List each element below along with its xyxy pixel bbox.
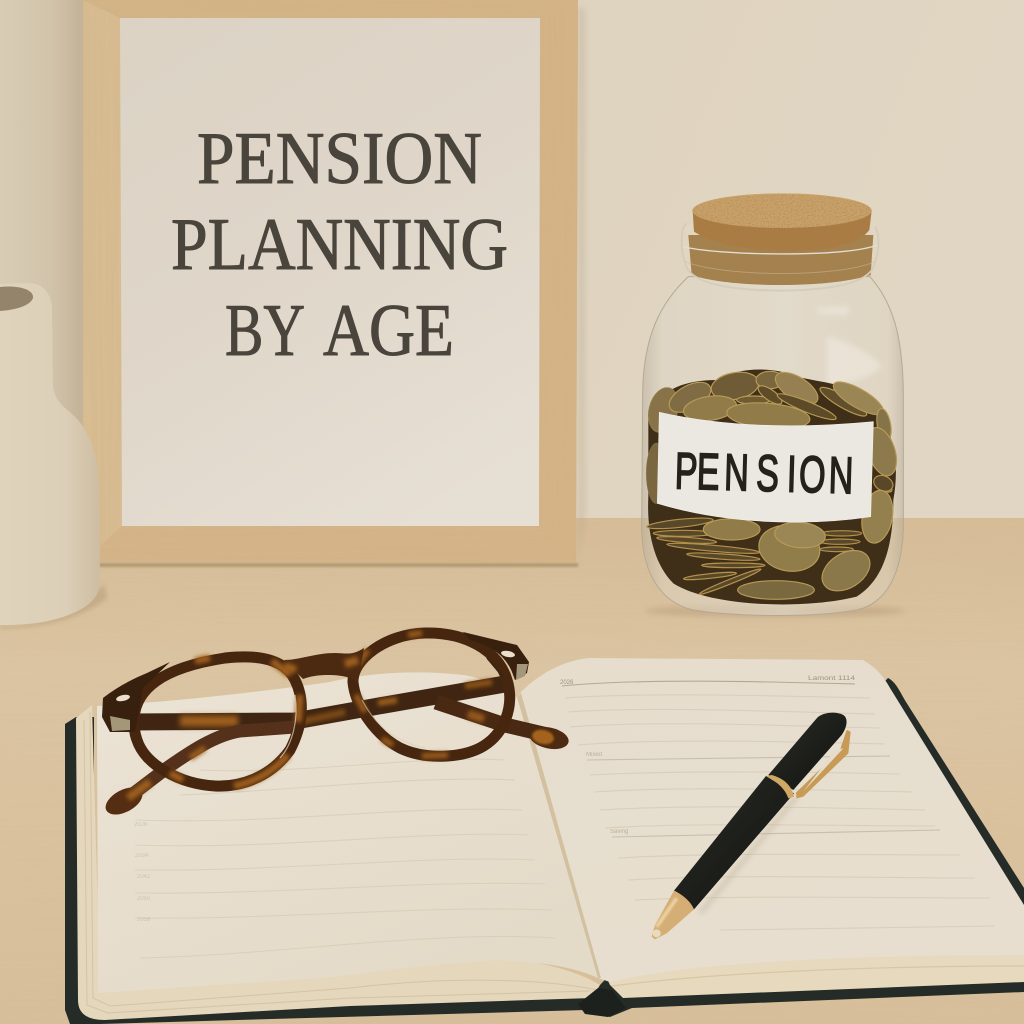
jar of coins	[642, 193, 903, 615]
glass highlight	[817, 307, 882, 387]
endpiece left	[102, 662, 170, 732]
cork stopper top	[692, 193, 872, 251]
wooden desk	[0, 518, 1024, 1024]
jar body	[642, 277, 903, 615]
bridge	[284, 648, 364, 682]
poster title: PLANNING	[171, 204, 508, 286]
left page	[97, 672, 598, 993]
coins	[644, 366, 902, 604]
vase	[0, 283, 107, 629]
poster title: AGE	[323, 290, 454, 372]
endpiece right	[463, 632, 529, 680]
eyeglasses	[101, 632, 571, 820]
page small text: 2026	[560, 680, 574, 686]
pen cap	[768, 713, 847, 790]
pen	[652, 713, 851, 939]
poster title	[171, 118, 508, 372]
poster title: PENSION	[197, 118, 482, 200]
right page	[517, 658, 1024, 982]
gold band	[766, 775, 794, 798]
page small text: 2026	[134, 822, 148, 828]
notebook	[65, 658, 1024, 1024]
page small text: Lamont 1114	[808, 676, 856, 682]
glass neck	[682, 223, 879, 291]
page small text: 2058	[137, 917, 151, 923]
pen shadow	[700, 797, 797, 913]
pen clip	[796, 730, 851, 798]
spine tab	[578, 988, 626, 1017]
left page rules	[135, 759, 555, 958]
spine shadow	[517, 693, 601, 978]
gold tip	[652, 891, 694, 939]
page small text: Saving	[610, 829, 628, 835]
left page block	[76, 705, 600, 1020]
temple arm left	[101, 727, 295, 820]
page small text: Mixed	[586, 752, 602, 758]
right lens rim	[353, 633, 510, 756]
page small text: 2042	[137, 874, 151, 880]
wall background	[0, 0, 1024, 520]
temple arm right	[436, 702, 571, 752]
cork stopper lower	[688, 235, 873, 285]
pen barrel	[674, 776, 794, 909]
right page rules	[562, 681, 995, 930]
picture frame	[83, 0, 585, 567]
left lens rim	[134, 657, 301, 786]
notebook cover	[65, 678, 1024, 1024]
right page block	[598, 930, 1024, 998]
page small text: 2050	[137, 896, 151, 902]
back temple bar	[128, 682, 505, 722]
stacks	[646, 472, 895, 596]
pension label	[657, 412, 873, 522]
page small text: 2034	[135, 853, 149, 859]
label text: PENSION	[674, 442, 854, 505]
jar shadow	[645, 605, 905, 617]
poster title: BY	[225, 290, 305, 372]
page small text	[134, 676, 856, 923]
